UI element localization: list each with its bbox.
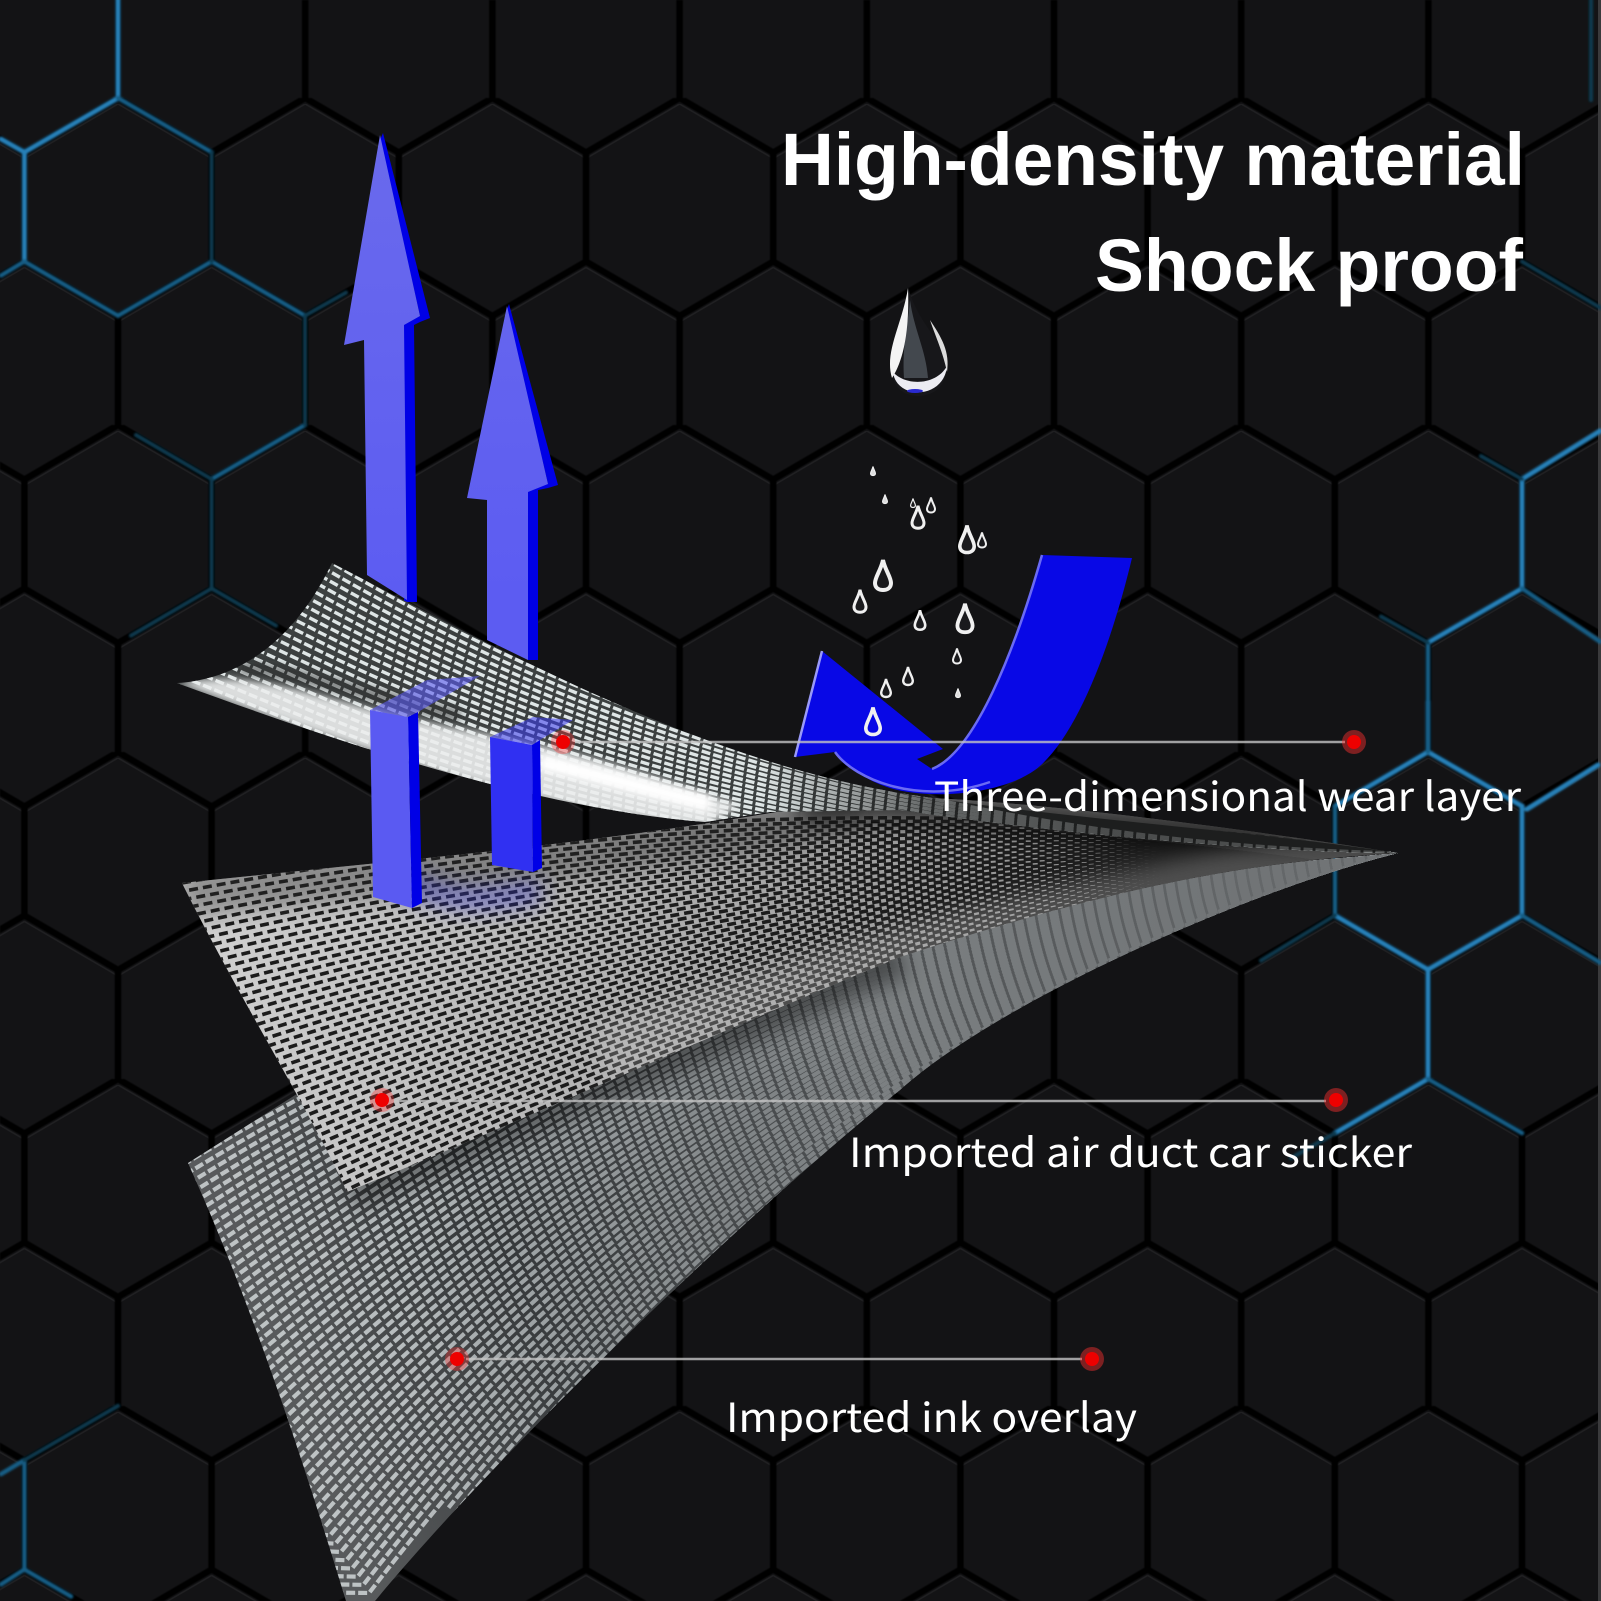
sheet: three-dimensional wear layer (top layer) [177, 563, 1396, 853]
label: wear layer: Three-dimensional wear layer [934, 765, 1521, 823]
callout: wear layer leader line and dots [551, 730, 1366, 754]
lower blue arrow: left stem [370, 676, 480, 908]
icon: small water droplets [854, 466, 986, 734]
label: ink overlay: Imported ink overlay [726, 1386, 1137, 1444]
label: air duct car sticker: Imported air duct car sticker [849, 1121, 1413, 1179]
title: line one: High-density material [781, 118, 1525, 201]
callout: ink overlay leader line and dots [445, 1347, 1104, 1371]
icon: large water drop [890, 287, 948, 396]
callout: air duct leader line and dots [370, 1088, 1348, 1112]
sheet: imported ink overlay (bottom layer) [188, 853, 1398, 1601]
curved blue arrow [795, 555, 1132, 794]
sheet: imported air duct car sticker (middle layer) [182, 798, 1398, 1192]
title: line two: Shock proof [1095, 224, 1523, 307]
upper blue arrow: tall [344, 133, 430, 602]
upper blue arrow: short [467, 304, 558, 660]
lower blue arrow: right stem [490, 717, 573, 872]
